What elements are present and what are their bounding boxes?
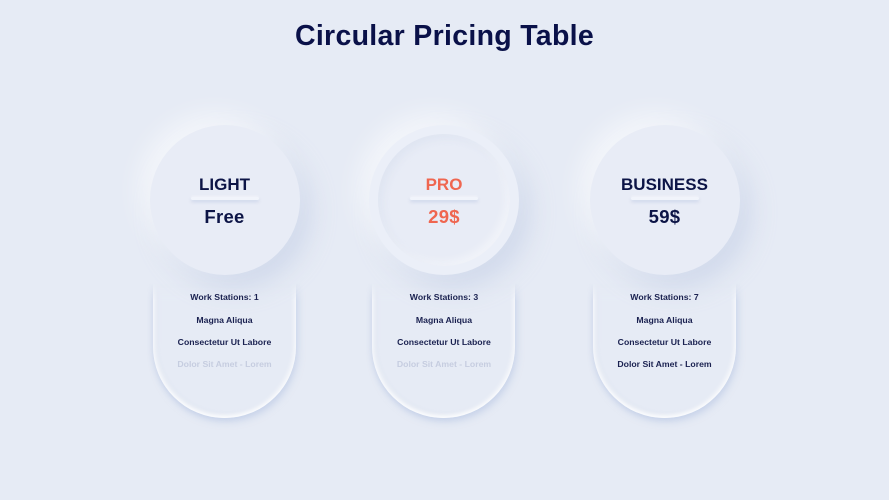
feature: consectetur: Consectetur Ut Labore (397, 337, 491, 347)
plan name: light: LIGHT (199, 175, 250, 194)
divider: light (190, 197, 258, 200)
feature: work stations: Work Stations: 1 (190, 292, 259, 302)
price: business: 59$ (649, 206, 680, 227)
features outline: light (150, 290, 300, 424)
plan name: pro: PRO (426, 175, 462, 194)
feature: dolor disabled: Dolor Sit Amet - Lorem (177, 359, 272, 369)
price circle: business (590, 125, 740, 275)
feature: work stations: Work Stations: 3 (410, 292, 478, 302)
divider: pro (410, 197, 478, 200)
title: Circular Pricing Table (295, 20, 594, 52)
feature: dolor disabled: Dolor Sit Amet - Lorem (397, 359, 491, 369)
feature: magna aliqua: Magna Aliqua (416, 315, 472, 325)
feature: work stations: Work Stations: 7 (630, 292, 699, 302)
panel: pro plan (364, 120, 533, 424)
price: light: Free (204, 206, 245, 227)
panel: business plan (586, 120, 754, 424)
divider: business (630, 197, 698, 200)
feature: magna aliqua: Magna Aliqua (636, 315, 693, 325)
price: pro: 29$ (428, 206, 460, 227)
inner circle: pro (378, 134, 510, 266)
feature: dolor: Dolor Sit Amet - Lorem (617, 359, 712, 369)
feature: consectetur: Consectetur Ut Labore (618, 337, 711, 347)
feature: consectetur: Consectetur Ut Labore (178, 337, 271, 347)
features outline: pro (369, 290, 519, 424)
price circle: pro (369, 125, 519, 275)
panel: light plan (146, 120, 314, 424)
feature: magna aliqua: Magna Aliqua (196, 315, 253, 325)
plan name: business: BUSINESS (621, 175, 708, 194)
price circle: light (150, 125, 300, 275)
features outline: business (590, 290, 740, 424)
